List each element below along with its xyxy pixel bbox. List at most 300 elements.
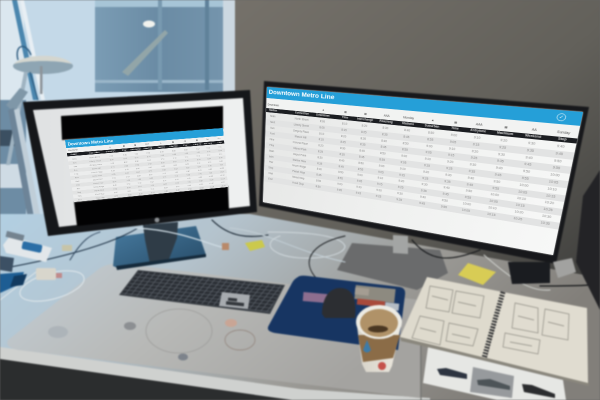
right table rows: 9:45 (494, 173, 502, 177)
right table rows: 9:55 (492, 187, 499, 191)
right table rows: 9:10 (474, 136, 481, 140)
left table icon row: ▲ (160, 142, 162, 144)
left table rows: 9:30 (218, 146, 222, 148)
right table rows: 8:40 (339, 159, 344, 163)
yellow cable clip (245, 240, 265, 251)
left table rows (68, 146, 228, 202)
left monitor bottom black bar (74, 186, 229, 226)
right table rows: 8:35 (360, 143, 366, 147)
right table rows: 8:55 (338, 177, 343, 180)
right table rows: 8:25 (340, 141, 346, 144)
right table header row (266, 108, 577, 144)
left table icon row (66, 136, 224, 153)
left table rows: 8:45 (136, 171, 140, 173)
left table rows: 9:55 (199, 180, 203, 182)
right table rows: 9:15 (448, 154, 454, 158)
right table rows: 9:25 (422, 177, 428, 181)
left table rows: 8:50 (148, 166, 152, 169)
right table rows: 9:05 (337, 188, 342, 192)
left table rows: 8:40 (113, 184, 117, 187)
right table rows: 9:00 (426, 144, 433, 148)
right table title bar: Downtown Metro Line (269, 88, 335, 101)
left table rows: Main (75, 180, 80, 183)
right table icon row: Downtown (268, 103, 279, 107)
left table header row: Connection (89, 151, 100, 154)
left table rows: 8:25 (124, 165, 128, 167)
left table icon row: ▦ (134, 144, 136, 146)
right table rows: 9:30 (528, 142, 536, 146)
left table rows: North Street (89, 156, 100, 159)
desk front edge (0, 347, 430, 400)
mouse (322, 288, 355, 318)
right table rows: 9:05 (450, 140, 456, 144)
wall socket (553, 258, 576, 278)
left table rows: Hood Stop (96, 196, 105, 199)
right table header row: Interchange (357, 117, 373, 122)
right table rows: 8:45 (403, 135, 409, 139)
left table rows: 9:20 (185, 163, 189, 165)
left table header row: Suburban (169, 145, 178, 148)
left table rows: 9:25 (186, 167, 189, 169)
right table rows: 8:15 (319, 138, 324, 142)
left table rows: 9:10 (196, 148, 199, 150)
left table rows: 8:35 (135, 164, 139, 166)
right table icon row: ▲ (431, 119, 434, 122)
right table icon row: ▦ (344, 111, 347, 114)
right table icon row: ▦ (504, 126, 508, 129)
left table rows: 10:05 (220, 171, 224, 173)
right table rows: 9:35 (468, 170, 475, 174)
right table rows: 10:05 (462, 208, 470, 213)
left table rows: 9:35 (186, 174, 190, 176)
right table rows: 10:20 (544, 201, 554, 205)
left table rows: Gregory Place (90, 163, 102, 166)
left table rows: 9:35 (218, 149, 222, 152)
left table icon row: ▦ (196, 139, 198, 141)
phones at desk edge (0, 256, 27, 293)
left table header row: Reaching (144, 147, 152, 150)
left table header row: Station (70, 153, 77, 156)
right monitor table (263, 87, 583, 255)
left table rows: 8:10 (123, 154, 127, 156)
left table rows: 10:10 (220, 174, 225, 177)
right table rows: 8:20 (362, 124, 367, 128)
left table title bar (65, 128, 224, 148)
right table rows: 9:30 (445, 173, 452, 177)
left table rows: 10:00 (199, 183, 203, 186)
right table rows: 10:05 (518, 190, 527, 195)
right table rows: 10:00 (490, 193, 499, 197)
right table rows: 9:05 (357, 180, 362, 183)
right table rows: 8:20 (341, 135, 346, 138)
right table rows: North Street (295, 117, 309, 122)
right table rows: 8:30 (340, 147, 345, 150)
left table rows: Main (72, 158, 77, 160)
left table rows: 9:55 (209, 172, 212, 174)
right table rows: Manor Park (293, 147, 306, 151)
left table rows: 8:15 (123, 157, 127, 160)
left table rows: 8:55 (172, 153, 176, 156)
right table rows: 9:00 (379, 164, 384, 168)
left table rows: 9:50 (208, 168, 212, 171)
right table rows: Pier (269, 161, 273, 164)
sticky note (458, 263, 496, 285)
right table header row: Time (451, 127, 459, 131)
left table rows: 10:15 (210, 186, 214, 188)
left table rows: Depot Point (93, 178, 103, 181)
left table icon row: Sun (218, 137, 221, 140)
left table rows: 9:25 (197, 158, 200, 161)
left table header row (67, 140, 224, 156)
left table rows: 10:05 (209, 179, 213, 181)
right table rows: 9:45 (555, 152, 563, 156)
right table header row: Stop (558, 137, 567, 141)
right table rows: 8:35 (317, 162, 322, 165)
coffee cup (356, 305, 402, 372)
right table rows: Next (270, 121, 275, 124)
right table header row: Time (342, 116, 348, 119)
right table rows: Grove Ridge (292, 164, 306, 169)
left table rows: 8:35 (125, 172, 129, 174)
right table rows: 9:25 (470, 156, 477, 160)
right monitor stand base rear (508, 262, 550, 284)
right table rows: Corona Place (293, 141, 308, 146)
left table rows: 8:20 (111, 169, 115, 172)
left table rows: 9:45 (208, 165, 212, 167)
left table rows: 8:20 (124, 161, 128, 163)
right table rows: 10:00 (519, 183, 529, 188)
right table rows: 8:00 (320, 120, 325, 123)
right table rows: Main (269, 150, 274, 153)
left table rows: 9:45 (198, 173, 202, 175)
left table rows: 9:10 (162, 172, 166, 175)
left table rows: 9:05 (128, 194, 132, 196)
left table rows: 9:40 (219, 153, 222, 155)
left table header row: Stations (158, 146, 165, 149)
right monitor screen glow (263, 87, 583, 255)
right table rows: 9:55 (441, 205, 447, 209)
left table rows: 8:40 (126, 176, 130, 178)
left table rows: 8:30 (112, 177, 116, 179)
right table header row: Station (269, 109, 277, 112)
right table rows: 8:15 (341, 129, 347, 132)
right table rows: 9:30 (469, 163, 476, 167)
left table rows: 9:00 (127, 190, 131, 192)
right table rows: End (268, 177, 273, 181)
right table rows: 10:10 (517, 197, 526, 201)
icon: check circle (556, 113, 567, 121)
right table rows: 10:00 (550, 173, 560, 178)
left table rows: 9:15 (150, 184, 154, 187)
right table rows: 9:10 (400, 167, 406, 171)
floor below desk (0, 356, 300, 400)
right table rows: 8:55 (402, 148, 408, 152)
right table rows: 9:20 (447, 160, 454, 164)
left table rows: Manor Park (92, 174, 102, 177)
right table rows: 8:55 (379, 158, 385, 162)
left table rows: 9:30 (207, 154, 211, 156)
left table rows: 9:15 (139, 192, 143, 195)
right table rows: 9:05 (425, 151, 432, 155)
right table rows: 9:25 (376, 195, 381, 198)
right table rows: 9:35 (421, 189, 427, 193)
left monitor table (65, 128, 228, 202)
right table header row: Reaching (379, 120, 393, 124)
left table rows: 9:05 (184, 152, 188, 155)
left table icon row: ▦ (172, 141, 174, 143)
left table rows: 8:25 (112, 173, 115, 176)
left table rows: Pier (77, 187, 80, 190)
left table rows: 8:50 (172, 150, 176, 152)
left table rows: Grove Ridge (93, 185, 104, 188)
left table rows: 9:55 (220, 164, 223, 166)
left table rows: 9:05 (173, 160, 177, 163)
right table rows: Liberty Street (294, 123, 309, 128)
right table icon row: AA (531, 128, 537, 132)
left table rows: 9:30 (164, 186, 168, 189)
left table rows: 9:20 (151, 188, 154, 190)
notebook right page sketches (503, 303, 569, 354)
right table rows: 8:55 (358, 168, 363, 171)
right table rows: 9:15 (377, 183, 383, 186)
power adapter and USB hub (3, 231, 72, 280)
right table rows: 8:25 (361, 131, 367, 134)
right table rows: 8:35 (339, 153, 345, 157)
left table header row: Entrytime (193, 143, 201, 146)
left table rows: 9:05 (138, 185, 142, 188)
right table header row: Stations (402, 122, 414, 126)
right table rows: 9:25 (446, 167, 453, 171)
right table rows: 9:15 (356, 191, 361, 195)
right table rows: 8:50 (316, 179, 321, 183)
right table rows: 9:35 (396, 198, 402, 202)
right table rows: 10:10 (488, 206, 497, 210)
left table rows: 9:25 (175, 175, 178, 177)
right table rows (268, 114, 574, 230)
left table rows: 9:45 (219, 156, 223, 159)
left table header row: Downtown (106, 150, 115, 153)
orange cable clip (222, 243, 229, 250)
left table rows: 9:45 (176, 189, 180, 191)
left table rows: 9:20 (174, 171, 178, 174)
left table rows: 8:55 (137, 178, 141, 181)
right table rows: 10:35 (540, 221, 550, 226)
right table rows: 9:30 (498, 153, 505, 157)
left table rows: 10:15 (220, 178, 225, 180)
right table rows: 8:40 (404, 129, 410, 132)
left table rows: 8:55 (114, 195, 118, 197)
left table rows: 8:45 (148, 163, 152, 165)
left monitor screen (33, 98, 250, 227)
left table rows: 9:25 (163, 183, 167, 185)
left table rows: 9:45 (187, 181, 191, 183)
left table rows: 8:50 (161, 158, 164, 160)
right table rows: 9:20 (500, 139, 508, 143)
left table rows: 9:00 (149, 173, 153, 176)
left table rows: 9:00 (184, 149, 188, 151)
left table rows: Parish Stop (94, 189, 104, 192)
right table title bar (267, 87, 583, 126)
left table rows: 9:20 (206, 147, 210, 149)
right table rows: 9:15 (424, 164, 430, 168)
left table rows: 9:40 (198, 169, 202, 171)
left table header row: Interchange (130, 148, 141, 151)
left table rows: Fuel (74, 169, 78, 171)
left table rows: 8:40 (136, 167, 140, 170)
left table rows: 8:45 (113, 188, 117, 190)
icon: check circle: ✓ (559, 114, 564, 120)
right table rows: 9:10 (377, 177, 383, 180)
left table rows: 9:00 (138, 182, 141, 184)
left table rows: 8:10 (110, 162, 114, 165)
right table rows: Parish Stop (292, 170, 305, 175)
right table rows: 8:30 (382, 126, 388, 130)
left table rows: 9:40 (208, 161, 211, 163)
right table rows: 10:20 (514, 210, 524, 215)
left table rows: 9:35 (207, 157, 211, 160)
left table rows: 9:15 (163, 176, 166, 178)
left table rows: 8:40 (160, 151, 164, 153)
left table rows: 8:05 (110, 158, 114, 161)
right monitor bezel (259, 81, 589, 264)
right table rows: 9:35 (444, 180, 451, 184)
right table rows: 9:10 (425, 157, 431, 161)
left table rows: 8:55 (149, 170, 152, 172)
right table rows: Inlet (268, 172, 273, 175)
right table rows: 9:50 (523, 170, 530, 174)
wall (228, 0, 600, 300)
right monitor stand (337, 235, 448, 290)
right table rows: 8:30 (360, 137, 366, 141)
right table rows: 9:40 (467, 176, 474, 180)
right table rows: 9:40 (443, 186, 450, 190)
right table rows: Fina (269, 144, 274, 147)
left table rows: Next (73, 161, 77, 164)
left table rows: 10:00 (209, 175, 213, 178)
right table rows: 9:20 (376, 189, 382, 192)
left monitor top black bar (61, 106, 223, 140)
right table icon row (266, 98, 580, 139)
right table rows: 8:55 (427, 138, 434, 142)
right table rows: 9:45 (419, 202, 425, 205)
left table rows: 9:20 (197, 155, 200, 157)
left table title bar: Downtown Metro Line (67, 138, 113, 147)
left table rows: End (78, 198, 82, 201)
left table rows: 9:30 (186, 170, 190, 173)
right table header row: Entrytime (470, 129, 486, 133)
right table rows: 9:20 (398, 180, 404, 183)
dark cabinet on the right (576, 170, 600, 310)
right table rows: 8:50 (338, 171, 343, 174)
left table rows: 8:45 (126, 179, 130, 182)
right table icon row: Sunday (557, 130, 570, 135)
right table rows: 9:00 (337, 183, 343, 186)
right table rows: 8:45 (359, 155, 364, 159)
right table header row: Connection (295, 111, 309, 116)
left table rows: 8:50 (127, 183, 130, 185)
keyboard (119, 270, 285, 314)
left table rows: 9:05 (162, 169, 166, 171)
left table rows: 9:10 (150, 181, 154, 183)
left table rows: Wood Stop (95, 192, 104, 196)
right table header row: Suburban (424, 124, 440, 129)
right table icon row: ▦ (454, 121, 458, 124)
left table rows: 8:40 (147, 159, 151, 161)
right table rows: 8:05 (319, 126, 325, 130)
left table rows: 9:25 (207, 150, 210, 153)
left table rows: 10:25 (221, 184, 226, 187)
right table rows: 9:40 (420, 195, 426, 199)
right table rows: 10:10 (547, 187, 557, 192)
left table rows: Fina (75, 176, 79, 179)
right table rows: 8:40 (381, 139, 387, 143)
right table rows: 9:50 (493, 180, 501, 184)
right table rows: 10:00 (463, 202, 471, 206)
left table rows: Marine Row (93, 182, 103, 185)
right table rows: 9:45 (466, 183, 473, 187)
left table rows: 9:40 (176, 185, 179, 188)
right table rows: 10:15 (546, 194, 556, 199)
notebook spiral binding (484, 292, 503, 358)
printed product sheet (423, 347, 566, 400)
left table rows: Stop (77, 191, 81, 194)
left table header row: Time (122, 149, 127, 151)
left table rows: Fine (74, 173, 78, 175)
left table rows: 8:30 (146, 152, 150, 154)
right table rows: 9:15 (473, 143, 480, 147)
left table rows: Sun (73, 165, 77, 168)
left table rows: 9:10 (173, 164, 177, 166)
left table rows: 9:00 (173, 157, 176, 159)
left table icon row: Mon (145, 143, 149, 145)
right table rows: 10:15 (487, 213, 496, 217)
right table rows: 8:20 (318, 144, 323, 148)
left table rows: 8:20 (134, 153, 138, 155)
left table rows: 8:30 (135, 160, 139, 162)
left table icon row: ▲ (109, 146, 111, 148)
right table rows: 8:50 (380, 152, 386, 156)
desk cables (0, 220, 590, 307)
window (0, 0, 235, 240)
desk surface (0, 214, 600, 400)
right table rows: 9:15 (399, 173, 405, 177)
left table rows: 8:30 (125, 168, 129, 171)
left table rows: 9:30 (197, 162, 201, 164)
right table rows: Wood Stop (292, 176, 304, 180)
desk lamp (6, 46, 73, 230)
left table rows: 9:00 (161, 165, 165, 168)
right table rows: Fuel (270, 132, 275, 136)
right table rows: 8:55 (316, 185, 321, 189)
right table rows: 8:40 (317, 168, 322, 171)
right table rows: 9:25 (499, 146, 506, 150)
right table rows: Main (270, 115, 276, 118)
left table rows: 10:00 (220, 167, 224, 169)
left table rows: 9:50 (219, 160, 223, 162)
right table rows: 9:25 (398, 186, 404, 190)
right table rows: 10:05 (549, 180, 559, 185)
right table rows: 9:50 (442, 199, 448, 203)
left table header row: Stop (217, 141, 222, 144)
left table rows: 8:00 (109, 155, 113, 157)
desk mat (7, 264, 420, 398)
right table rows: 9:45 (442, 193, 449, 196)
right table rows: 9:00 (451, 134, 457, 137)
right table icon row: AAA (475, 123, 483, 127)
left table rows: 9:50 (188, 184, 191, 187)
left table rows: 10:05 (199, 187, 204, 189)
right table rows: 9:50 (465, 189, 472, 193)
